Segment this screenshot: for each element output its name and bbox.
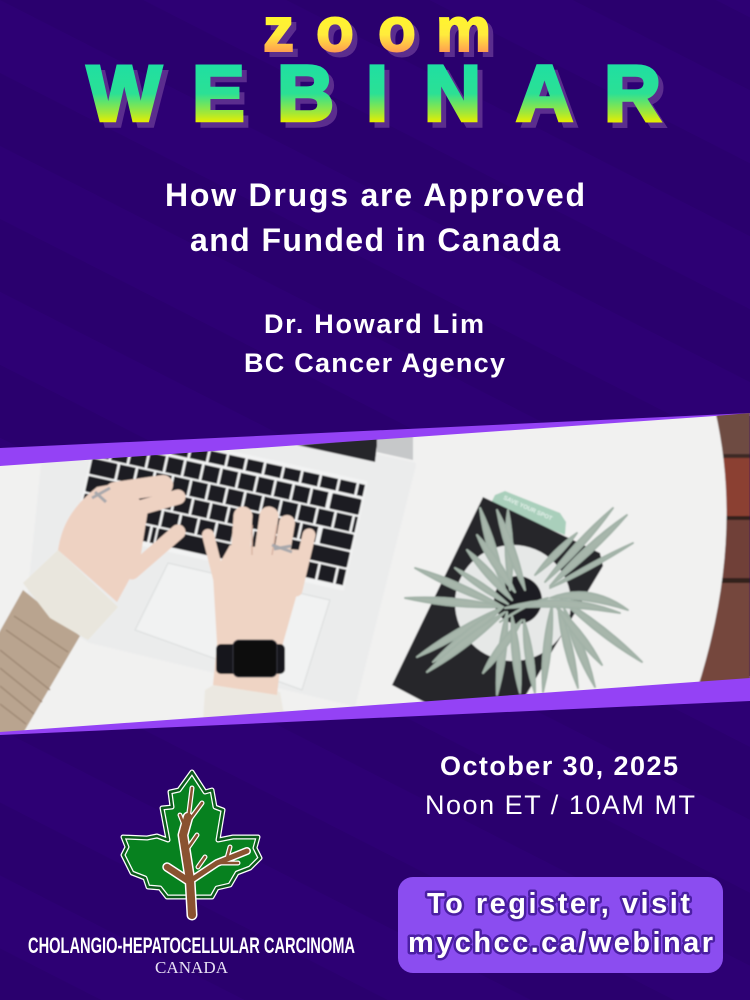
logo: maple leaf with tree (123, 772, 260, 915)
teal card: SAVE YOUR SPOT (502, 495, 553, 522)
heading: talk title: How Drugs are Approved (165, 177, 585, 213)
watch (216, 640, 285, 677)
sweater sleeve (0, 590, 80, 735)
laptop body (30, 440, 413, 703)
logo wordmark: CHOLANGIO-HEPATOCELLULAR CARCINOMA (28, 933, 355, 958)
photo: laptop and plant on table (0, 405, 750, 740)
leaf (123, 772, 260, 897)
right hand (208, 516, 309, 695)
tree white edge (167, 788, 247, 915)
heading: talk title: and Funded in Canada (190, 222, 560, 258)
left hand (58, 482, 178, 602)
keyboard (83, 451, 366, 586)
black notebook (392, 497, 603, 705)
register box: mychcc.ca/webinar (408, 927, 713, 959)
leaf inner outline (123, 772, 260, 897)
banner: purple frame (0, 413, 750, 735)
brick ground (698, 413, 750, 682)
heading: talk title (165, 177, 585, 258)
air plant leaves (405, 508, 642, 695)
speaker: BC Cancer Agency (244, 348, 505, 378)
tree brown branches (167, 788, 247, 915)
logo wordmark: CANADA (155, 958, 229, 977)
register box (398, 877, 723, 973)
white pot (455, 545, 571, 661)
title: webinar: WEBINAR (87, 48, 661, 138)
date and time (425, 751, 695, 820)
date and time: Noon ET / 10AM MT (425, 790, 695, 820)
trackpad (135, 563, 330, 690)
title: zoom: zoom (268, 1, 496, 70)
title: webinar: WEBINAR (92, 54, 666, 143)
teal card (490, 491, 566, 535)
speaker: Dr. Howard Lim (264, 309, 484, 339)
right sleeve (204, 685, 284, 717)
speaker (244, 309, 505, 378)
left cuff (23, 550, 118, 640)
logo wordmark (28, 933, 355, 977)
register box: To register, visit (427, 888, 690, 920)
date and time: October 30, 2025 (440, 751, 678, 781)
rings (92, 488, 292, 552)
white table (0, 410, 727, 740)
laptop hinge (297, 434, 413, 462)
